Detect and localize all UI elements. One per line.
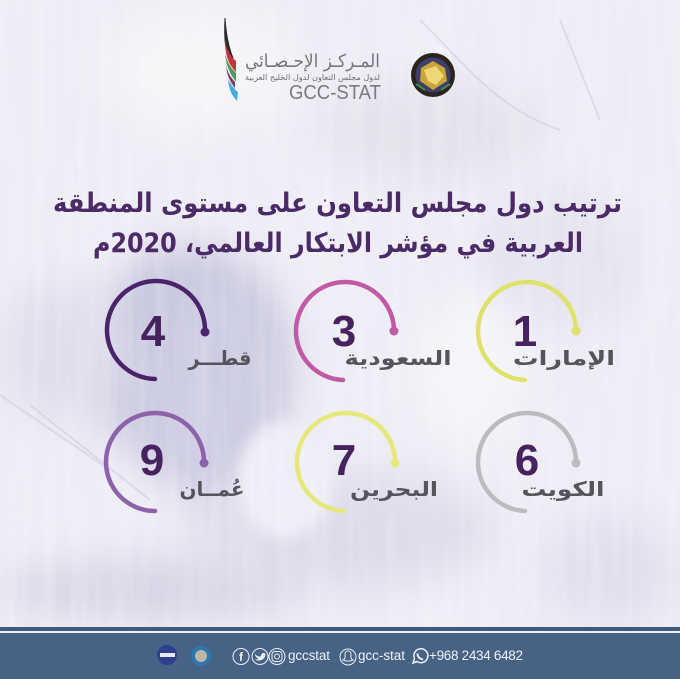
rank: Qatar 4 <box>107 281 252 379</box>
icon: TUV badge <box>191 646 211 666</box>
rank: Bahrain 7 <box>297 413 438 511</box>
logo arabic subtitle: لدول مجلس التعاون لدول الخليج العربية <box>245 73 380 82</box>
title: العربية في مؤشر الابتكار العالمي، 2020م <box>93 228 583 259</box>
icon: whatsapp <box>413 649 428 663</box>
logo latin name: GCC-STAT <box>289 82 381 104</box>
icon: certification badge 1 <box>157 645 177 665</box>
rank: Saudi Arabia 3 <box>296 282 452 380</box>
rank: Bahrain 7: 7 <box>332 436 356 485</box>
rank: Emirates 1: 1 <box>513 307 537 356</box>
title <box>53 188 622 259</box>
icon: facebook <box>233 648 249 664</box>
rank: Oman 9: 9 <box>140 436 164 485</box>
rank: Oman 9 <box>106 413 245 511</box>
icon: twitter <box>252 648 268 664</box>
rank: Kuwait 6 <box>478 413 604 511</box>
rank: Emirates 1: الإمارات <box>513 346 615 370</box>
handle: gcc-stat: gcc-stat <box>358 648 405 663</box>
rank: Emirates 1 <box>478 282 615 380</box>
phone number: +968 2434 6482 <box>429 648 523 663</box>
rank: Kuwait 6: الكويت <box>522 477 604 501</box>
icon: GCC emblem <box>411 53 455 97</box>
icon: snapchat <box>340 649 356 665</box>
logo: GCC-STAT <box>225 18 381 104</box>
icon: flag ribbon <box>225 18 238 101</box>
rank: Qatar 4: 4 <box>141 307 166 356</box>
rank: Saudi Arabia 3: 3 <box>332 307 356 356</box>
title: ترتيب دول مجلس التعاون على مستوى المنطقة <box>53 188 622 219</box>
rank: Bahrain 7: البحرين <box>350 477 438 501</box>
handle: gccstat: gccstat <box>288 648 330 663</box>
icon: facebook: f <box>239 650 244 664</box>
logo arabic name: المـركـز الإحـصـائي <box>245 51 380 72</box>
rank: Kuwait 6: 6 <box>515 436 539 485</box>
rank: Saudi Arabia 3: السعودية <box>344 346 452 370</box>
rank: Oman 9: عُمــان <box>180 477 244 501</box>
rank: Qatar 4: قطـــر <box>188 346 252 370</box>
footer bar <box>0 627 680 679</box>
icon: instagram <box>269 648 285 664</box>
